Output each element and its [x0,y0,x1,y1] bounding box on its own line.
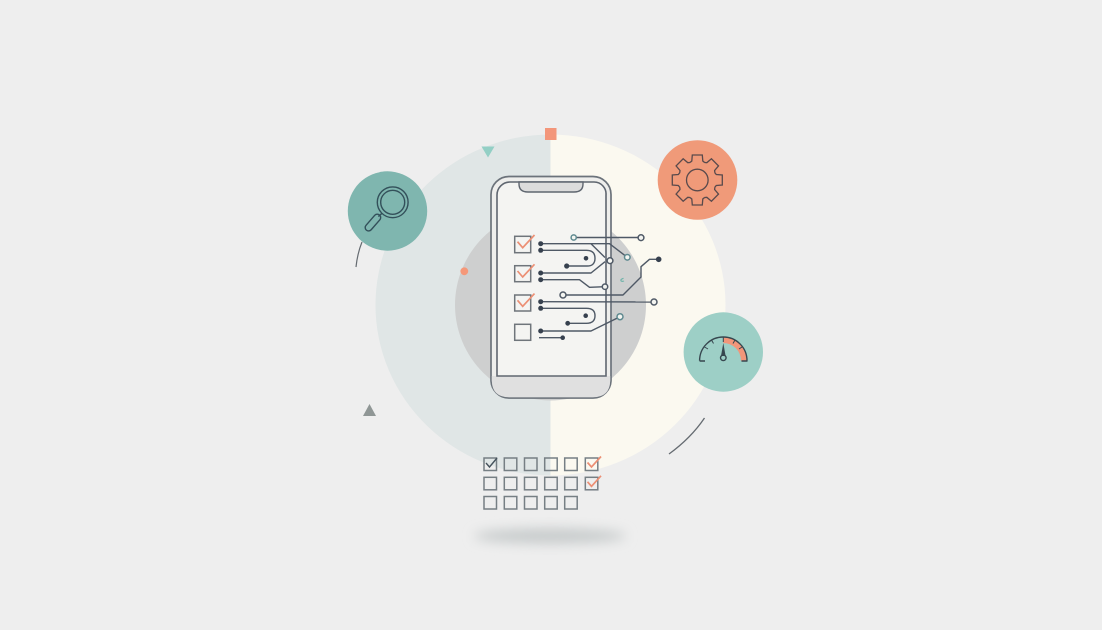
grey triangle [363,404,376,416]
background circle [376,134,726,476]
phone checklist [515,235,534,340]
orange square [545,128,556,140]
ground shadow [474,528,626,544]
small teal mark [621,278,624,281]
curved line left [356,242,362,267]
curved line right [669,418,704,454]
orange dot [460,267,468,275]
inner grey circle [455,210,646,400]
illustration [348,128,763,548]
icon: gauge badge [684,312,763,392]
icon: gear badge [658,140,737,220]
trace nodes [538,235,662,340]
checkbox grid [484,456,601,509]
teal triangle [482,146,494,158]
icon: phone [491,176,611,398]
circuit traces [539,238,659,338]
icon: magnifier badge [348,171,427,251]
